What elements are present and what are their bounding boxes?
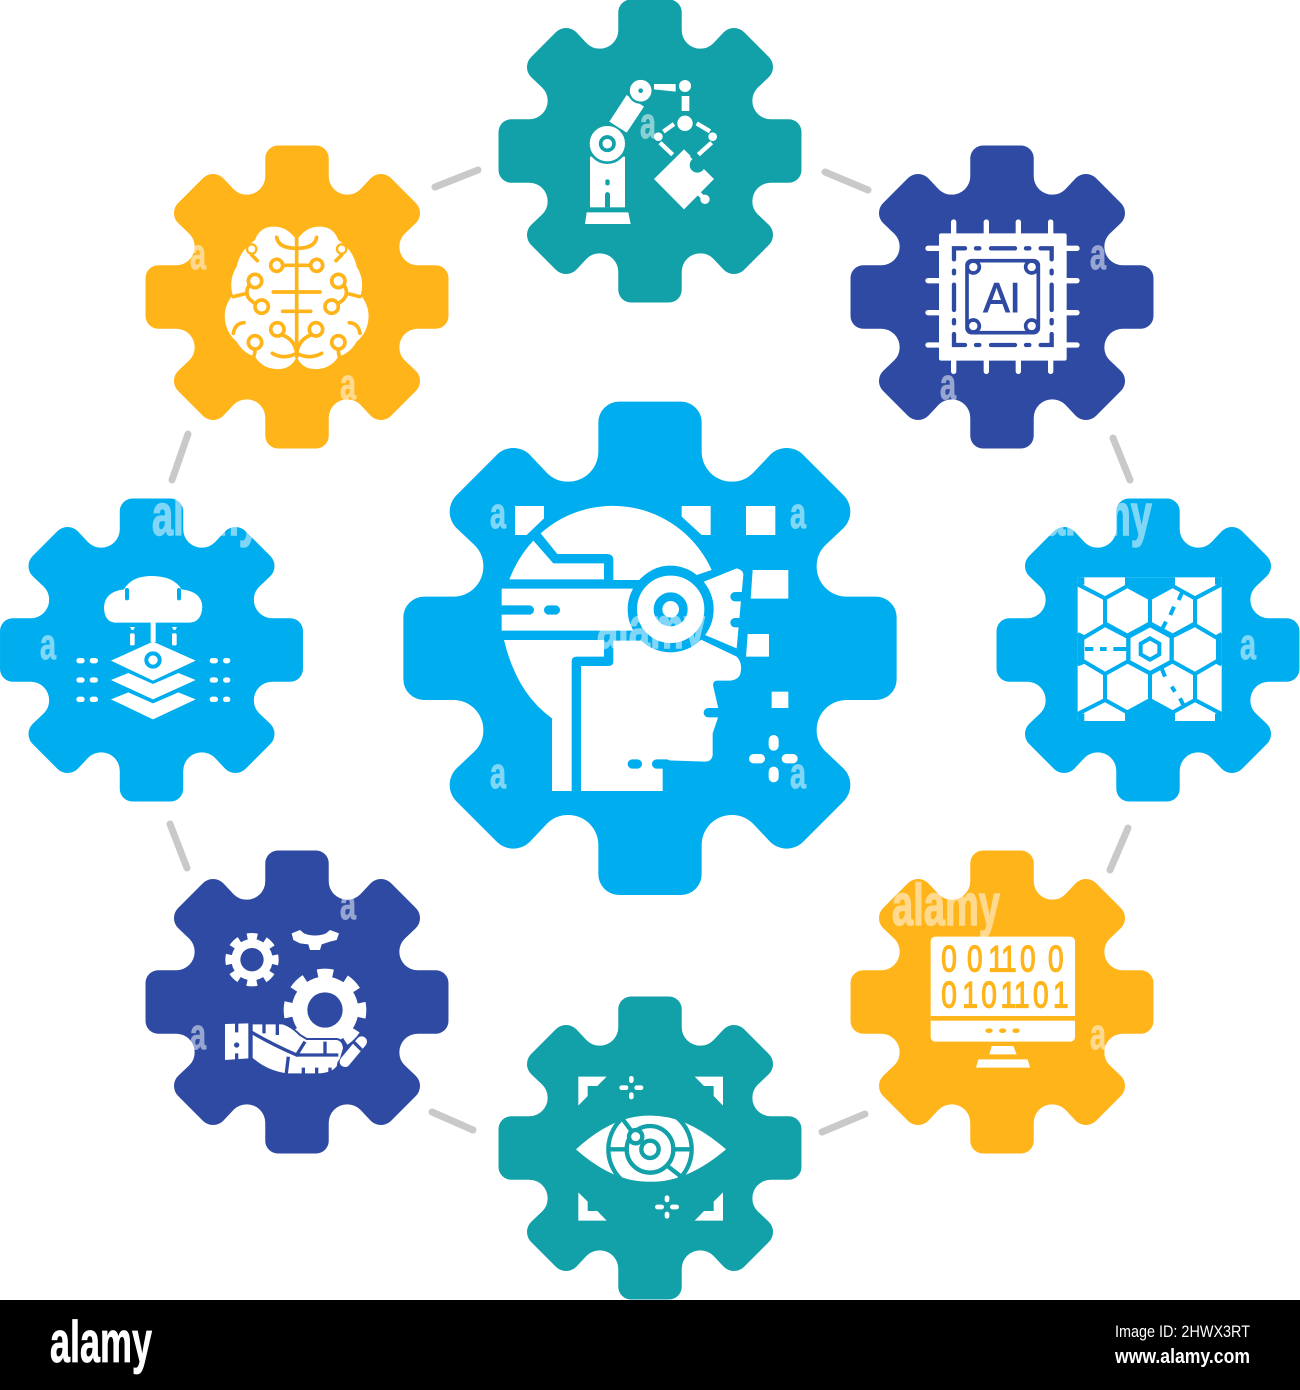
image id: Image ID: 2HWX3RT <box>1115 1322 1250 1341</box>
gear shape <box>146 146 448 448</box>
footer bar <box>0 1300 1300 1390</box>
gear shape <box>851 851 1153 1153</box>
watermark overlay: a <box>190 1010 206 1059</box>
watermark overlay: alamy <box>1044 483 1152 548</box>
icon: robot hand with cogs <box>225 930 362 1076</box>
connector dashes ring <box>170 170 1130 1132</box>
panel: brain gear <box>146 146 448 448</box>
icon: cyborg head <box>497 506 798 791</box>
watermark overlay: a <box>640 99 656 148</box>
panel: eye scan gear <box>499 997 801 1299</box>
gear shape <box>499 997 801 1299</box>
panel: robot arm gear <box>499 0 801 302</box>
panel: hexagon grid gear <box>997 499 1299 801</box>
watermark overlay: a <box>1090 1010 1106 1059</box>
watermark overlay: alamy <box>152 483 260 548</box>
gear shape <box>499 0 801 302</box>
gear shape <box>0 499 303 801</box>
central gear shape <box>403 402 897 895</box>
watermark overlay: a <box>790 489 806 538</box>
website: www.alamy.com <box>1114 1346 1250 1368</box>
watermark overlay: a <box>1090 230 1106 279</box>
watermark overlay: a <box>490 749 506 798</box>
binary digits row 2: 0101101 <box>941 973 1069 1015</box>
panel: binary monitor gear <box>851 851 1153 1153</box>
footer logo: alamy <box>50 1310 152 1375</box>
watermark overlay: a <box>190 230 206 279</box>
binary digits row 1: 001100 <box>941 938 1064 980</box>
icon: AI chip <box>928 222 1077 371</box>
watermark overlay <box>40 99 1256 1059</box>
icon: circuit brain <box>225 227 369 369</box>
gear shape <box>997 499 1299 801</box>
icon: cloud and data layers <box>79 576 228 719</box>
icon: monitor with binary code <box>931 937 1075 1068</box>
icon: hexagon network <box>1078 577 1222 721</box>
panel: central gear with cyborg head <box>403 402 897 895</box>
panel: cloud layers gear <box>0 499 303 801</box>
watermark overlay: a <box>340 880 356 929</box>
icon: eye with scan frame <box>576 1077 726 1221</box>
watermark overlay: a <box>1240 620 1256 669</box>
gear shape <box>851 146 1153 448</box>
watermark overlay: a <box>340 360 356 409</box>
watermark overlay: a <box>790 749 806 798</box>
panel: robot hand gear <box>146 851 448 1153</box>
icon: robot arm and puzzle <box>585 79 717 224</box>
watermark overlay: alamy <box>892 873 1000 938</box>
watermark overlay: a <box>40 620 56 669</box>
watermark overlay: alamy <box>597 596 705 661</box>
gear shape <box>146 851 448 1153</box>
panel: AI chip gear <box>851 146 1153 448</box>
watermark overlay: a <box>490 489 506 538</box>
watermark overlay: a <box>940 360 956 409</box>
AI label: AI <box>983 275 1021 321</box>
